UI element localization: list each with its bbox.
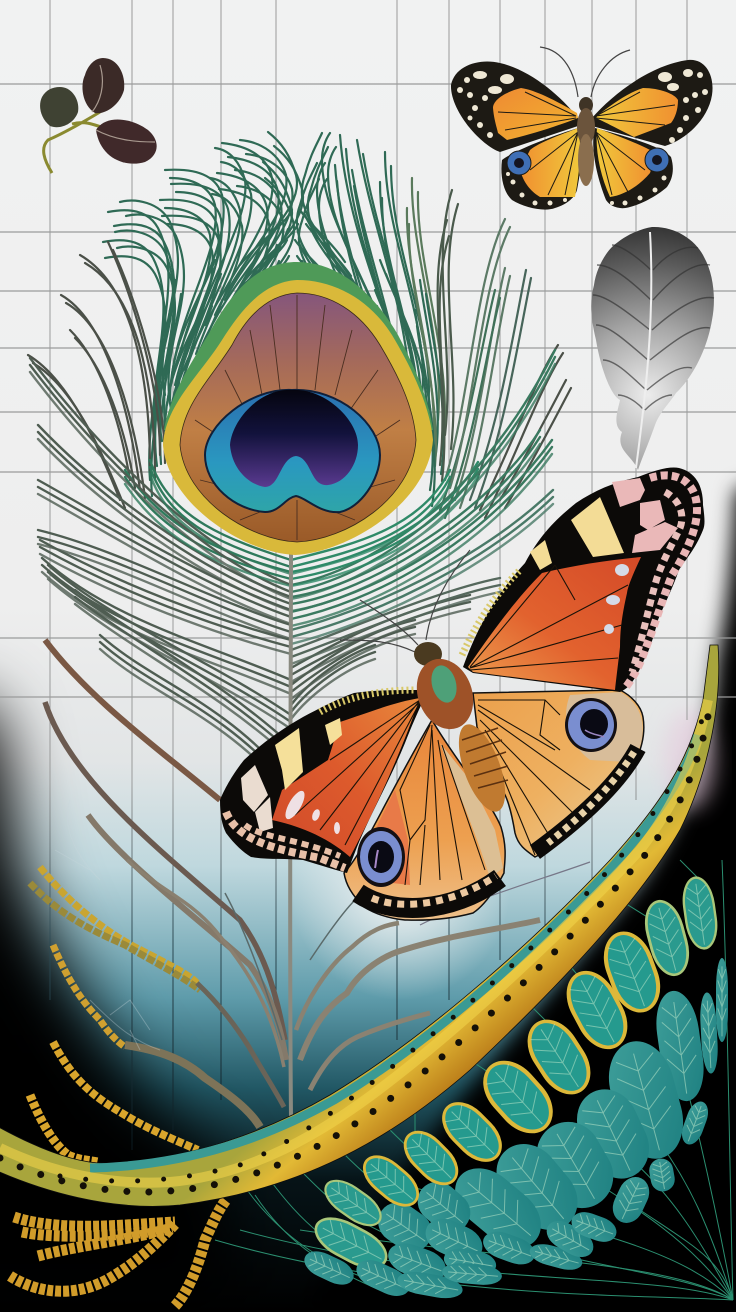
monarch: black wings xyxy=(451,60,713,210)
monarch: veins xyxy=(498,92,675,195)
left forewing: margin cells xyxy=(226,812,345,868)
barbs: upper green plumes xyxy=(103,132,458,506)
right hindwing: eye spot xyxy=(565,698,617,752)
right forewing: cream band xyxy=(530,497,624,570)
right hindwing: pale eye field xyxy=(566,692,643,762)
eye: radial lines xyxy=(195,295,400,540)
left forewing: costa stripes xyxy=(320,690,415,712)
left hindwing: veins xyxy=(400,725,485,885)
left forewing: cream band xyxy=(275,718,342,790)
faint web veining xyxy=(55,800,160,1050)
fan veins bottom right xyxy=(215,860,733,1300)
butterfly: antennae xyxy=(340,550,470,652)
monarch butterfly xyxy=(451,47,713,210)
left hindwing: eye spot xyxy=(357,827,405,887)
band: bright highlight xyxy=(0,700,708,1183)
eye: yellow ring xyxy=(163,280,433,555)
left hindwing: red patch xyxy=(364,790,410,885)
seed barbs: brown, grey and gold xyxy=(30,640,590,1162)
grey feather: quill xyxy=(636,232,651,468)
left forewing: white spots xyxy=(282,788,340,834)
left hindwing: margin cells xyxy=(372,876,496,904)
band: teal upper stripe xyxy=(90,735,698,1168)
barbs: outer grey plumes xyxy=(28,219,571,518)
butterfly: body xyxy=(407,642,515,817)
monarch: body xyxy=(577,97,595,186)
butterfly: left hindwing xyxy=(344,720,505,920)
left hindwing: pale inner strip xyxy=(440,743,503,878)
band: black spots xyxy=(0,705,710,1192)
grey feather xyxy=(591,227,714,470)
peacock butterfly xyxy=(220,467,704,920)
right forewing: white spots xyxy=(604,564,629,634)
feather rachis xyxy=(288,545,293,1118)
butterfly: right hindwing xyxy=(473,690,644,857)
right hindwing: black margin xyxy=(535,748,638,852)
eye: dark core xyxy=(230,390,358,487)
right forewing: veins xyxy=(470,565,628,670)
right forewing: pink apex patches xyxy=(612,478,678,553)
grey feather: barbs xyxy=(593,245,714,410)
left forewing: veins xyxy=(295,700,420,845)
eye: green ring xyxy=(164,262,433,430)
eye: blue heart xyxy=(205,390,380,512)
left hindwing: black margin xyxy=(358,878,500,908)
right forewing: margin cells xyxy=(625,475,697,688)
butterfly: right forewing xyxy=(462,467,704,692)
monarch: white spots xyxy=(457,69,708,206)
leaves bottom right: teal row xyxy=(300,958,728,1302)
left forewing: pale patches xyxy=(241,765,273,832)
butterfly: left forewing xyxy=(220,690,422,873)
right hindwing: veins xyxy=(478,700,590,855)
speckled gold band xyxy=(0,645,719,1206)
monarch: eye spots xyxy=(507,148,669,175)
monarch: orange panels xyxy=(493,88,678,197)
small leaf sprig xyxy=(40,58,157,173)
monarch: antennae xyxy=(540,47,630,97)
gold sprigs bottom left xyxy=(10,1200,226,1306)
leaves bottom right: rimmed row xyxy=(317,874,721,1234)
barbs: lower fan xyxy=(30,350,555,789)
left forewing: orange panel xyxy=(272,698,420,857)
right forewing: costa stripes xyxy=(462,570,520,655)
peacock feather xyxy=(28,132,571,1118)
eye: bronze disc xyxy=(180,293,416,542)
right hindwing: margin cells xyxy=(548,752,634,843)
right forewing: red-orange panel xyxy=(468,557,641,690)
